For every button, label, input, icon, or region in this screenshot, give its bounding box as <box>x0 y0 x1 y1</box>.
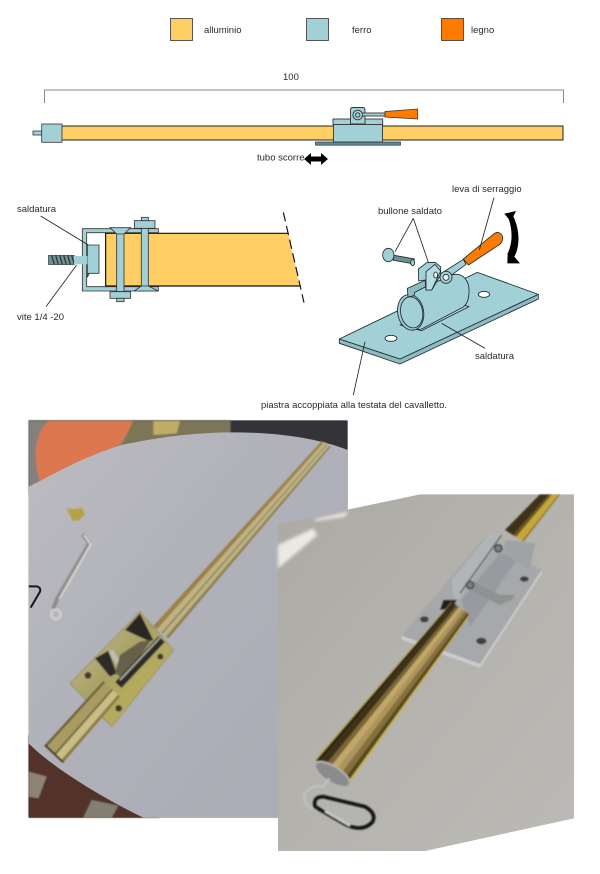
hook <box>304 778 329 810</box>
clamp wings and seam <box>95 613 162 685</box>
legend item: ferro <box>306 18 372 40</box>
clamp ridge plates <box>452 533 505 600</box>
window reflections <box>278 512 348 568</box>
bullone saldato label: bullone saldato <box>378 206 442 217</box>
upper tube <box>153 441 331 638</box>
photo: close-up of clamp and tube <box>278 494 574 851</box>
welded bolt <box>383 248 415 266</box>
dimension bracket with length 100: 100 <box>283 72 299 83</box>
clamp ear <box>350 108 385 124</box>
wrench <box>51 534 91 619</box>
saldatura label: saldatura <box>475 351 515 362</box>
clamp drawing <box>339 198 538 395</box>
front wing lever <box>473 582 515 605</box>
tube end cap <box>311 757 354 792</box>
base plate <box>316 142 400 145</box>
clamp cylinder <box>395 274 469 332</box>
clamp cylinder <box>462 553 517 627</box>
rear wing <box>503 540 535 570</box>
tube slide label and arrow <box>257 152 328 165</box>
base plate <box>339 272 538 364</box>
legend <box>170 18 494 40</box>
end cap and stud <box>33 124 62 142</box>
clamp and tube assembly <box>304 494 560 828</box>
dimension bracket with length 100 <box>44 72 564 103</box>
detail section of the tube end <box>17 204 304 323</box>
lower tube <box>45 681 120 762</box>
base plate <box>402 538 542 668</box>
leva di serraggio label: leva di serraggio <box>452 184 522 195</box>
lever handle <box>385 109 418 119</box>
side view diagram of the full tube <box>33 72 564 165</box>
legend item: legno <box>442 18 494 40</box>
piastra label: piastra accoppiata alla testata del cavalletto. <box>261 400 447 411</box>
curved double arrow <box>504 211 520 263</box>
cam and lever stem <box>434 259 466 283</box>
carabiner <box>315 797 374 828</box>
clamp body <box>333 119 383 142</box>
photo: tube on round table <box>29 420 348 818</box>
table top <box>29 432 348 818</box>
orange handle <box>463 233 503 265</box>
upper brass tube <box>505 494 560 542</box>
saldatura label: saldatura <box>17 204 57 215</box>
bolts <box>466 545 502 589</box>
lower brass tube <box>315 600 470 782</box>
photo background <box>29 420 348 818</box>
aluminium tube <box>61 126 563 140</box>
section drawing <box>41 212 304 307</box>
legend item: alluminio: alluminio <box>204 25 242 36</box>
mounting plate and tube <box>45 441 331 762</box>
wing nut <box>67 508 85 521</box>
tube saddle and weld <box>400 303 469 331</box>
photo background <box>278 494 574 851</box>
hex key <box>29 586 40 608</box>
mounting plate <box>70 612 173 727</box>
isometric clamp diagram <box>261 184 538 411</box>
background scene <box>29 420 231 818</box>
legend item: alluminio <box>170 18 242 40</box>
vite label: vite 1/4 -20 <box>17 312 64 323</box>
clamp ears <box>407 262 441 297</box>
legend item: legno: legno <box>471 25 494 36</box>
leader lines <box>353 198 494 395</box>
legend item: ferro: ferro <box>352 25 372 36</box>
tube slide label and arrow: tubo scorre <box>257 152 305 164</box>
